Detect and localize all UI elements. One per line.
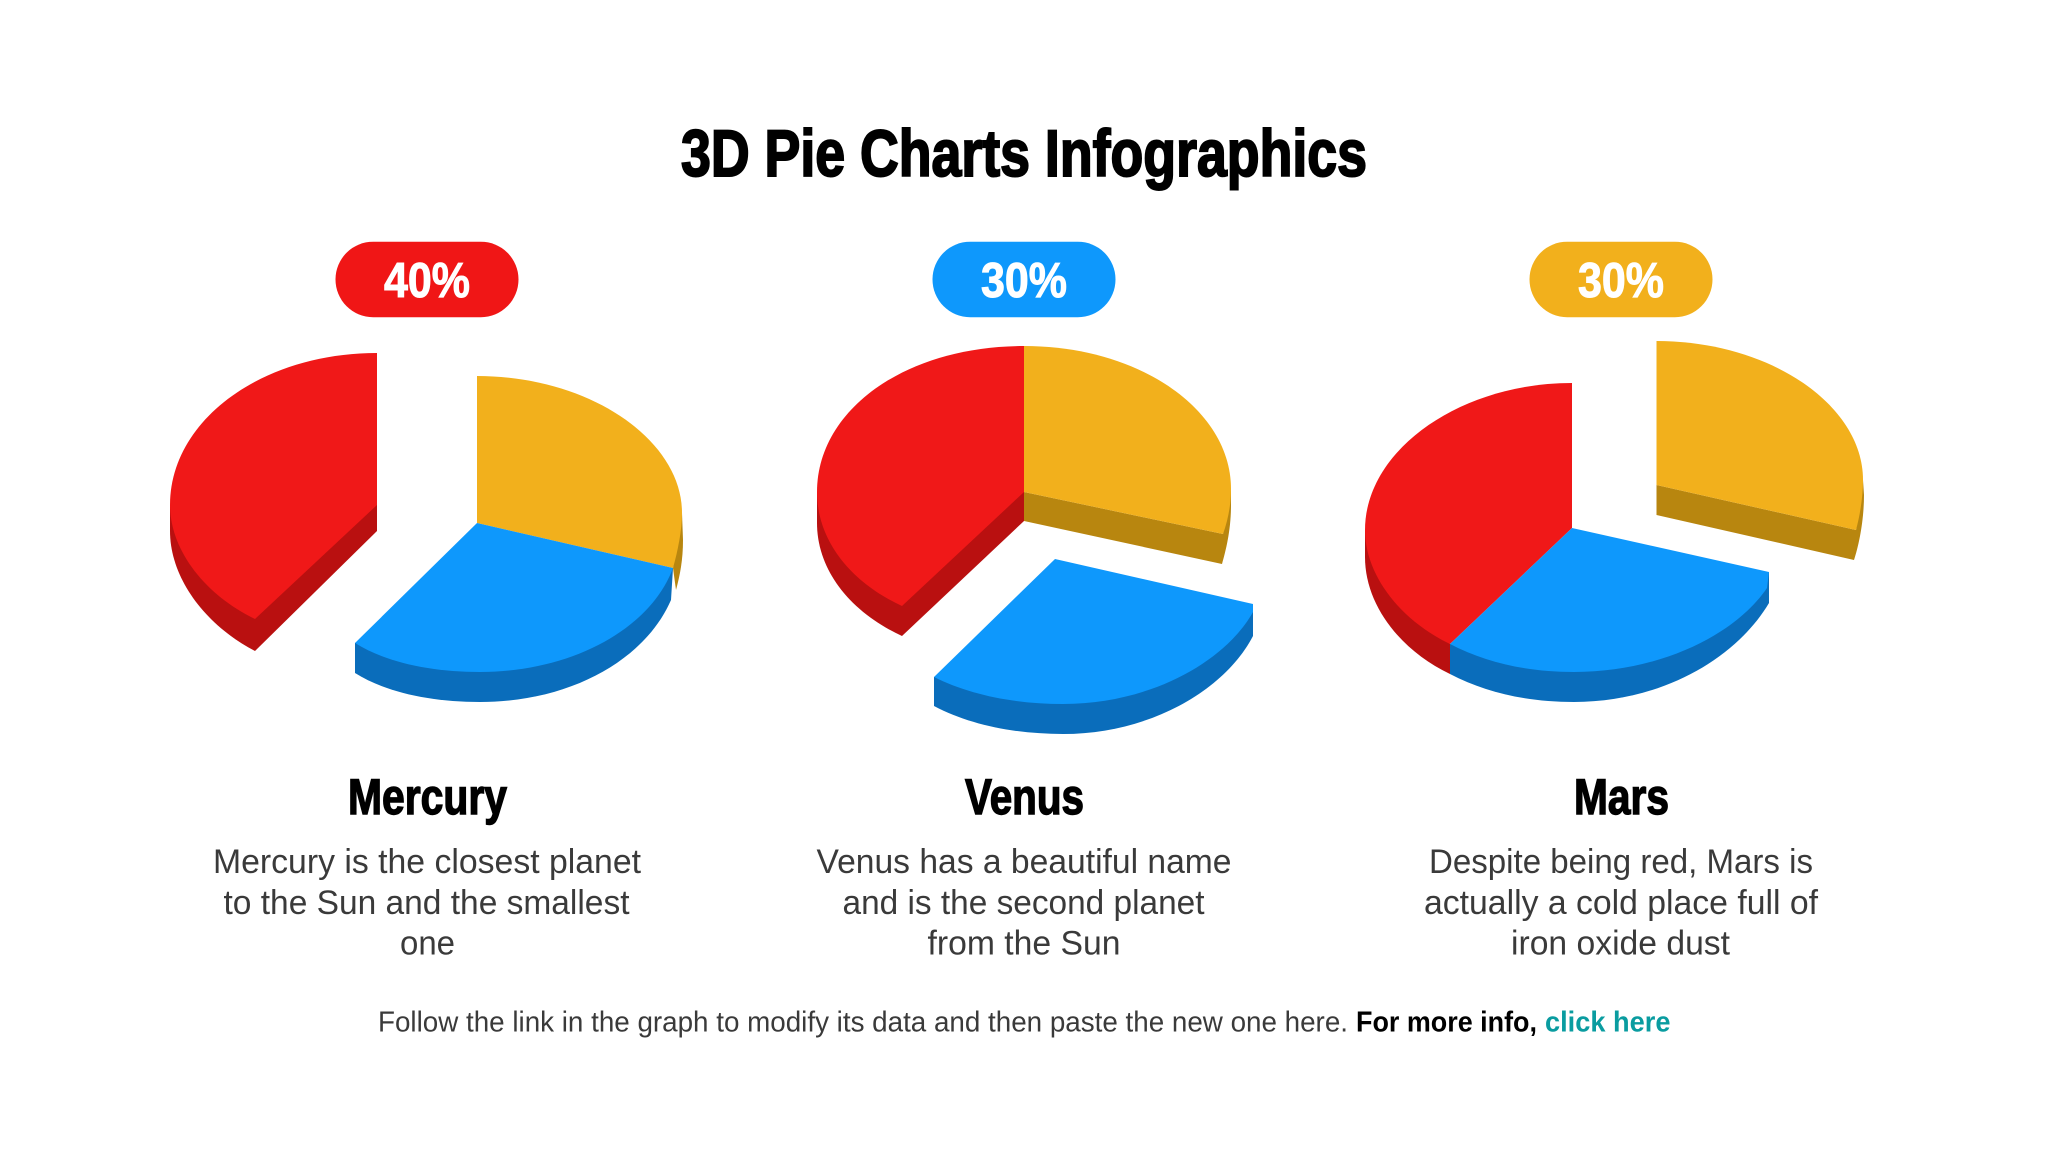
pie chart: Mars, yellow slice separated — [1365, 341, 1864, 702]
yellow slice — [1024, 346, 1231, 564]
blue slice — [355, 523, 673, 702]
pie chart: Venus, blue slice separated — [817, 346, 1253, 734]
blue slice — [1450, 528, 1769, 702]
pie chart: Mercury, red slice separated — [170, 353, 683, 702]
panel: Mars — [1365, 242, 1864, 962]
red slice — [1365, 383, 1572, 674]
description: Mercury: one — [400, 924, 455, 962]
heading: Venus: Venus — [965, 769, 1084, 825]
description: Mars — [1424, 843, 1818, 962]
description: Mercury: to the Sun and the smallest — [224, 884, 630, 922]
heading: Mars: Mars — [1574, 769, 1669, 825]
badge: 30% blue — [932, 242, 1116, 317]
description: Mercury: Mercury is the closest planet — [213, 843, 641, 881]
red slice — [817, 346, 1024, 636]
yellow slice — [1656, 341, 1864, 560]
description: Mars: iron oxide dust — [1511, 924, 1730, 962]
description: Mercury — [213, 843, 641, 962]
badge: 30% yellow: 30% — [1578, 254, 1664, 308]
red slice — [170, 353, 377, 651]
badge: 30% yellow — [1530, 242, 1712, 317]
description: Venus: and is the second planet — [842, 884, 1205, 922]
footer note: Follow the link in the graph to modify its data and then paste the new one here. — [378, 1006, 1348, 1038]
description: Mars: actually a cold place full of — [1424, 884, 1818, 922]
title: 3D Pie Charts Infographics — [681, 116, 1367, 190]
heading: Mercury: Mercury — [348, 769, 507, 825]
panel: Venus — [816, 242, 1253, 962]
badge: 40%: 40% — [384, 254, 470, 308]
description: Venus — [816, 843, 1232, 962]
badge: 30% blue: 30% — [981, 254, 1067, 308]
description: Mars: Despite being red, Mars is — [1429, 843, 1813, 881]
blue slice — [934, 559, 1253, 734]
description: Venus: from the Sun — [928, 924, 1120, 962]
footer note: For more info, — [1356, 1006, 1537, 1038]
panel: Mercury — [170, 242, 683, 962]
footer note: click here — [1545, 1006, 1670, 1038]
yellow slice — [477, 376, 683, 590]
description: Venus: Venus has a beautiful name — [816, 843, 1232, 881]
badge: 40% — [336, 242, 518, 317]
